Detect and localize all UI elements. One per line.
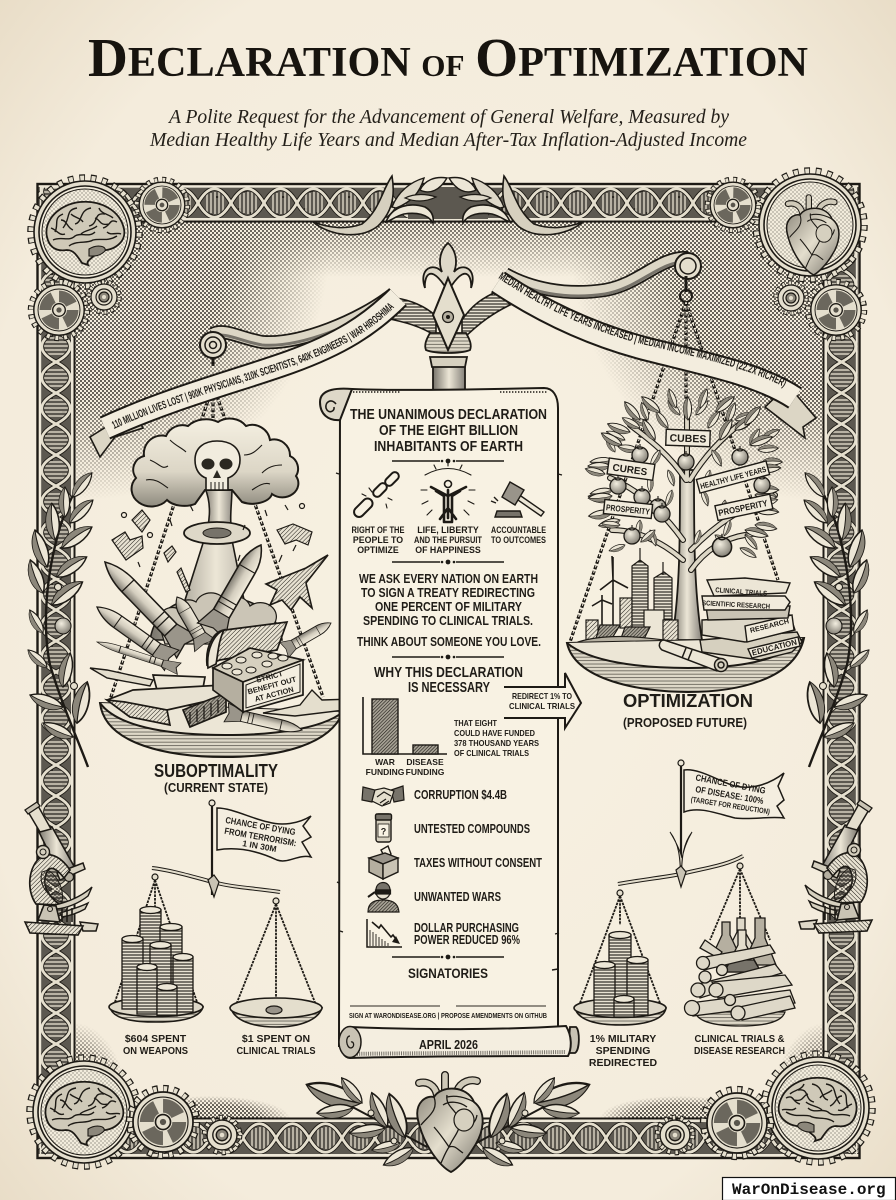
border: DNA helix frame [37,184,860,1158]
left pan: chest label [244,666,300,705]
left pan: bottom missile [224,703,304,739]
left pan: chest label: BENEFIT OUT [247,675,298,696]
left pan: chest label: STRICT [255,669,284,685]
caption: clinical trials spend [236,1033,316,1057]
scroll: treaty request: ONE PERCENT OF MILITARY [375,599,522,614]
heading: optimization: (PROPOSED FUTURE) [623,715,747,730]
scroll: why heading: WHY THIS DECLARATION [374,665,523,681]
scroll: main heading: OF THE EIGHT BILLION [379,423,518,439]
left pan: bowl [100,703,343,757]
arrow: redirect: CLINICAL TRIALS [509,701,575,711]
scroll: treaty request: THINK ABOUT SOMEONE YOU LOVE. [357,634,541,649]
scroll: treaty request: TO SIGN A TREATY REDIRECTING [361,585,535,600]
scroll: main heading [350,407,547,455]
gear: bottom right spoked [704,1090,770,1156]
right pan: bowl [567,638,804,692]
left pan: tank [107,675,226,727]
scroll: why heading: IS NECESSARY [408,680,490,696]
icon: bottom anatomical heart [417,1075,483,1172]
right pan: tree banner cubes: CUBES [669,432,707,446]
bottom laurel right [469,1075,593,1171]
gear: right upper third [808,282,864,338]
row: unwanted wars: UNWANTED WARS [414,890,501,904]
mini scale left: flag: FROM TERRORISM: [224,826,297,848]
heading: optimization [623,691,753,730]
bar chart: war vs disease funding: DISEASE [406,757,444,767]
microscope: right [799,800,872,933]
caption: weapons: $604 SPENT [125,1033,187,1045]
right pan: tree [610,415,775,640]
subtitle: Median Healthy Life Years and Median After-Tax Inflation-Adjusted Income [149,130,747,151]
divider one [392,459,504,463]
icon captions: ACCOUNTABLE [491,525,546,535]
subtitle [149,107,747,151]
balance: left beam highlight [213,295,392,342]
scroll: treaty request: WE ASK EVERY NATION ON EARTH [359,571,538,586]
icon captions: OF HAPPINESS [415,545,481,555]
right pan: tree banner prosperity left [603,500,653,518]
caption: weapons [123,1033,188,1057]
caption: 1% redirected: SPENDING [596,1045,650,1057]
right pan: tree banner cures: CURES [612,463,648,478]
caption: clinical trials spend: $1 SPENT ON [242,1033,310,1045]
row: taxes: TAXES WITHOUT CONSENT [414,856,542,870]
row: untested compounds: UNTESTED COMPOUNDS [414,822,530,836]
caption: 1% redirected: REDIRECTED [589,1057,658,1069]
heading: suboptimality: (CURRENT STATE) [164,780,268,795]
watermark: WarOnDisease.org [732,1181,886,1199]
row: dollar purchasing power: POWER REDUCED 96% [414,933,520,947]
banner: left statistics: 110 MILLION LIVES LOST | 900K PHYSICIANS, 310K SCIENTISTS, 640K ENGINEERS | WAR HIROSHIMA [112,303,394,429]
bar chart note: THAT EIGHT [454,718,498,728]
left pan: ship right [263,690,353,716]
mini scale left: flag: CHANCE OF DYING [225,815,296,837]
mini scale right: flag: (TARGET FOR REDUCTION) [690,795,771,816]
left pan: chest label: AT ACTION [254,685,295,704]
mini scale right: beam [617,856,743,896]
bar chart: war vs disease funding: FUNDING [406,767,445,777]
scroll: declaration panel [320,388,562,1046]
caption: clinical trials spend: CLINICAL TRIALS [236,1045,316,1057]
icon: broken chain [352,471,400,519]
right pan: book titles: CLINICAL TRIALS [715,587,768,598]
laurel: left [24,469,96,767]
mini scale right: flag: CHANCE OF DYING [695,772,766,796]
caption: clinical trials research [694,1033,785,1057]
gear: top left second [137,180,187,230]
microscope: left [25,802,98,935]
gear: top right second [708,180,758,230]
left pan: upright missile [197,537,275,639]
icon: pill bottle: ? [381,826,386,836]
scroll: treaty request: SPENDING TO CLINICAL TRIALS. [363,613,533,628]
right pan: tree leaves [584,387,782,560]
mini scale left: beam [152,868,280,904]
scroll: signatories: SIGN AT WARONDISEASE.ORG | PROPOSE AMENDMENTS ON GITHUB [349,1013,547,1020]
divider four [392,955,504,959]
mini scale right: flag: OF DISEASE: 100% [695,784,764,806]
icon: gavel [491,482,544,517]
arrow: redirect: REDIRECT 1% TO [512,691,572,701]
scroll: why heading [374,665,523,696]
bar chart: war vs disease funding [363,697,447,777]
row: corruption: CORRUPTION $4.4B [414,788,507,802]
row: dollar purchasing power: DOLLAR PURCHASING [414,921,519,935]
gear: bottom right small [658,1118,692,1152]
gear: bottom left large with brain [30,1058,138,1166]
left pan: missile 2 [90,597,179,670]
bar chart note: 378 THOUSAND YEARS [454,738,539,748]
icon captions: TO OUTCOMES [491,535,546,545]
icon: pill bottle [376,814,392,842]
subtitle: A Polite Request for the Advancement of General Welfare, Measured by [167,107,729,128]
scroll: main heading: INHABITANTS OF EARTH [374,439,523,455]
caption: clinical trials research: DISEASE RESEARCH [694,1045,785,1057]
balance: left beam ribbon [213,295,392,342]
right pan: book titles: RESEARCH [749,618,790,635]
row: dollar purchasing power [414,921,520,947]
left pan: explosion debris [112,504,312,592]
caption: weapons: ON WEAPONS [123,1045,188,1057]
gear: right upper small [776,283,806,313]
right pan: tree banner cubes [666,429,710,447]
scroll: main heading: THE UNANIMOUS DECLARATION [350,407,547,423]
icon: handshake [362,786,404,806]
banner: right outcomes [491,272,818,440]
icon captions: OPTIMIZE [357,545,399,555]
right pan: apples [610,444,770,557]
caption: 1% redirected [589,1033,658,1069]
right pan: rolled scroll [659,640,728,672]
top acanthus ornament left [313,176,447,235]
mini scale right: flasks and scrolls pan [684,918,795,1026]
gear: bottom right large with brain [764,1054,872,1162]
gear: top right large with heart [756,171,864,279]
right pan: tree banner prosperity right: PROSPERITY [718,498,768,518]
right pan: tree banner healthy life years: HEALTHY LIFE YEARS [699,465,768,491]
left pan: missile 4 [167,591,215,652]
chains: left pan [110,385,323,700]
heading: optimization: OPTIMIZATION [623,691,753,711]
divider two [392,560,504,564]
bar chart: war vs disease funding: WAR [375,757,395,767]
mini scale right: flag [670,760,784,880]
balance: fleur-de-lis column [423,243,473,392]
icon: ballot box [369,846,398,879]
gear: left upper small [89,282,119,312]
left pan: missile 1 [94,551,198,658]
mini scale right: redirected coins pan [574,869,770,1025]
mini scale left: chains and weapon coins pan [109,880,316,1022]
bar chart note: OF CLINICAL TRIALS [454,748,529,758]
gear: top left large with brain [31,178,139,286]
divider three [392,655,504,659]
left pan: smoke billows [158,593,276,644]
icon captions [352,525,546,555]
caption: clinical trials research: CLINICAL TRIALS & [694,1033,785,1045]
balance: central arm connectors [385,290,512,340]
right pan: book titles: EDUCATION [751,638,798,658]
left pan: fighter jet [266,555,328,610]
right pan: book titles: SCIENTIFIC RESEARCH [702,600,770,611]
icon captions: AND THE PURSUIT [414,535,483,545]
right pan: city with wind turbines and solar panels [578,548,680,652]
icon captions: LIFE, LIBERTY [417,525,479,535]
mini scale left: flag: 1 IN 30M [242,838,277,854]
gear: left upper third [31,282,87,338]
scroll: bottom roll with date [339,1026,579,1058]
scroll: bottom roll with date: APRIL 2026 [419,1037,478,1052]
bar chart: war vs disease funding: FUNDING [366,767,405,777]
title: DECLARATION OF OPTIMIZATION [88,27,808,88]
laurel: right [801,469,873,767]
balance: right beam ribbon [505,258,688,292]
left pan: mushroom cloud with skull [132,419,298,640]
balance: right scroll end and hook [675,253,701,302]
right pan: stack of books [700,578,802,660]
gear: bottom left small [205,1118,239,1152]
banner: right outcomes: MEDIAN HEALTHY LIFE YEARS INCREASED | MEDIAN INCOME MAXIMIZED (22.2X RICHER) [498,272,786,388]
balance: left scroll end and hook [200,332,226,366]
scroll: signatories [349,965,547,1020]
arrow: redirect [504,673,581,728]
balance: left beam shading [213,299,392,345]
caption: 1% redirected: 1% MILITARY [590,1033,656,1045]
gear: bottom left spoked [130,1089,196,1155]
balance: right beam highlight [505,258,688,292]
right pan: tree banner prosperity left: PROSPERITY [606,502,651,517]
scroll: treaty request [357,571,541,649]
heading: suboptimality [154,761,278,795]
right pan: book titles [702,587,798,658]
balance: right beam shading [505,262,688,296]
icon: figure with rays [421,462,475,522]
chains: right pan [570,302,778,642]
top ornament center panel [408,187,488,219]
icon: falling purchasing power chart [367,919,402,947]
icon: blindfolded soldier [368,882,399,912]
left pan: ship left [90,668,153,686]
bar chart note [454,718,539,758]
bar chart note: COULD HAVE FUNDED [454,728,535,738]
heading: suboptimality: SUBOPTIMALITY [154,761,278,781]
mini scale left: clinical trials pan [230,998,322,1027]
halftone background [75,222,823,1118]
right pan: tree banner cures [607,458,655,480]
bottom laurel left [303,1075,427,1171]
icon captions: PEOPLE TO [353,535,403,545]
scroll: signatories: SIGNATORIES [408,965,488,981]
mini scale left: flag [209,800,311,895]
left pan: thin missile [95,636,181,674]
top acanthus ornament right [449,176,583,235]
left pan: small rocket [280,615,335,658]
icon captions: RIGHT OF THE [352,525,405,535]
left pan: treasure chest [207,622,303,712]
